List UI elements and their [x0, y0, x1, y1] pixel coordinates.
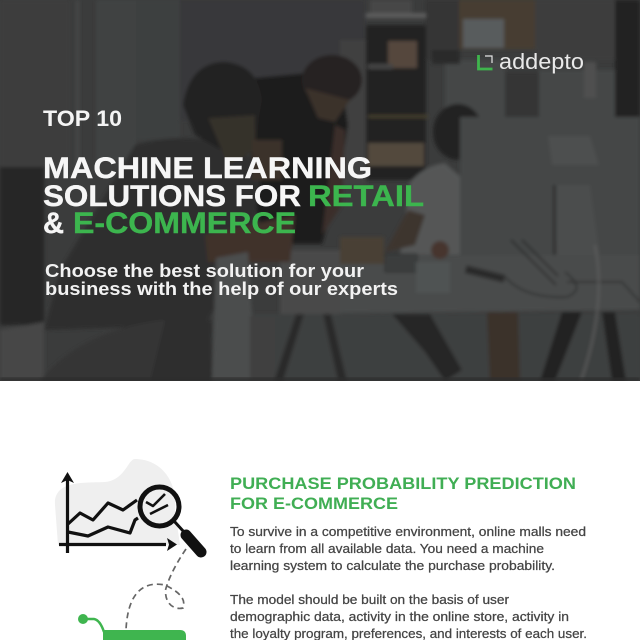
body text: to learn from all available data. You need a machine [230, 541, 544, 556]
title: SOLUTIONS FOR [43, 180, 301, 213]
title: MACHINE LEARNING [43, 152, 372, 185]
body text: learning system to calculate the purchase probability. [230, 558, 555, 573]
man centre [250, 70, 348, 244]
tagline [45, 261, 398, 299]
section heading: FOR E-COMMERCE [230, 494, 398, 513]
desk [340, 255, 640, 314]
man right [433, 104, 483, 160]
panel: hero photo of team at work [0, 0, 640, 381]
section heading [230, 474, 576, 513]
corkboard [459, 0, 535, 49]
section heading: PURCHASE PROBABILITY PREDICTION [230, 474, 576, 493]
body text: To survive in a competitive environment, online malls need [230, 524, 586, 539]
title [43, 152, 424, 240]
under desk [284, 316, 628, 377]
man left [44, 138, 262, 330]
shelf [366, 25, 426, 180]
icon: chart with magnifier [55, 459, 201, 553]
subtitle: top 10: TOP 10 [43, 106, 122, 131]
body text: The model should be built on the basis of user [230, 592, 510, 607]
logo: addepto: addepto [499, 49, 584, 74]
tagline: business with the help of our experts [45, 279, 398, 299]
body text: demographic data, activity in the online store, activity in [230, 609, 569, 624]
title: E-COMMERCE [73, 207, 296, 240]
title: & [43, 207, 64, 240]
body text [230, 524, 587, 640]
icon: logo bracket [478, 55, 492, 69]
back boards [445, 60, 505, 117]
title: RETAIL [308, 180, 424, 213]
tagline: Choose the best solution for your [45, 261, 364, 281]
monitor [460, 117, 640, 257]
icon: green shopping cart [78, 614, 186, 640]
dashed connector path [126, 549, 186, 630]
